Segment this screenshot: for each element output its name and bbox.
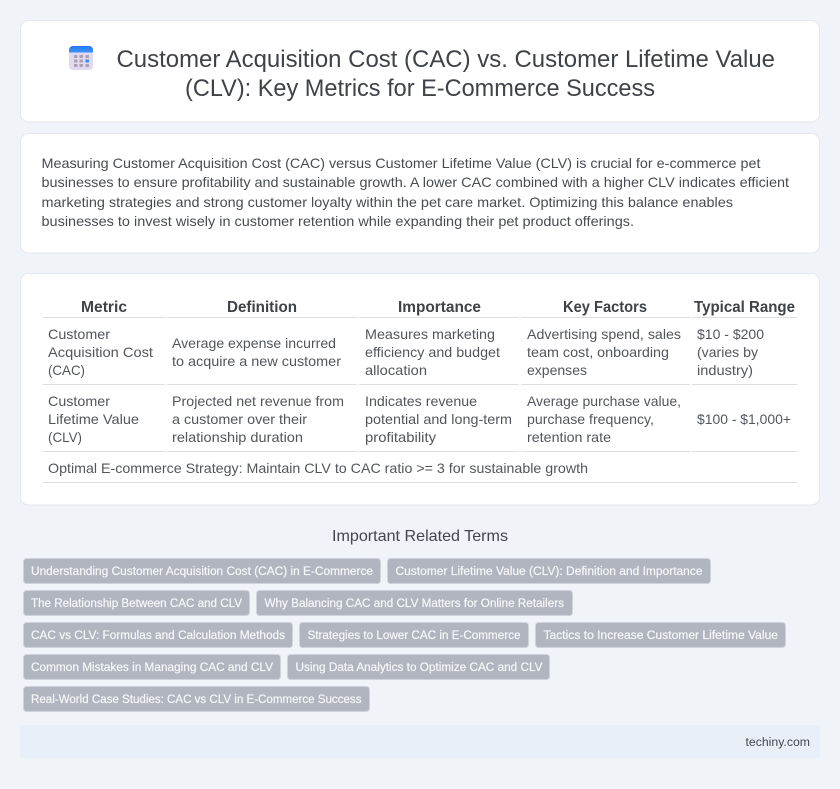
table row: CAC: Measures marketing [365,326,495,342]
table header row: Key Factors [563,299,647,316]
tag: Customer Lifetime Value (CLV): Definition and Importance [396,564,703,578]
tag [24,590,250,616]
table row: CAC: Average expense incurred [172,335,336,351]
title [116,46,775,102]
table row: CLV: $100 - $1,000+ [697,411,791,427]
tag: Understanding Customer Acquisition Cost (CAC) in E-Commerce [31,564,373,578]
tag [388,558,710,584]
table row: CAC: industry) [697,362,753,378]
tag: Why Balancing CAC and CLV Matters for Online Retailers [264,596,564,610]
table row: CLV: Indicates revenue [365,393,477,409]
table header row: Importance [398,299,481,316]
table row: CAC: Acquisition Cost [48,344,153,360]
tag: Real-World Case Studies: CAC vs CLV in E-Commerce Success [31,692,362,706]
table row: CAC: Customer [48,326,110,342]
table row: CLV: relationship duration [172,429,303,445]
table row: CAC: (varies by [697,344,758,360]
intro text block [42,155,789,229]
footer [20,725,820,758]
table row: CAC: Advertising spend, sales [527,326,681,342]
table row: CLV: profitability [365,429,436,445]
table header row [43,299,797,318]
table row: CLV: retention rate [527,429,611,445]
table row: CAC [43,326,797,385]
table row: CLV: Projected net revenue from [172,393,344,409]
table row: CAC: efficiency and budget [365,344,500,360]
tag [24,654,280,680]
table row: CAC: allocation [365,362,427,378]
table row: CLV: a customer over their [172,411,307,427]
table row: CLV [43,393,797,452]
panel: introduction [20,134,820,253]
heading: related terms: Important Related Terms [332,528,508,545]
tag [24,686,370,712]
table header row: Metric [81,299,127,316]
related terms tags [24,558,786,712]
tag [24,622,292,648]
table row: CLV: potential and long-term [365,411,512,427]
table row: CAC: $10 - $200 [697,326,764,342]
title: Customer Acquisition Cost (CAC) vs. Customer Lifetime Value [116,46,775,73]
intro text block: businesses to invest wisely in customer retention while expanding their pet product offerings. [42,213,634,229]
table row: strategy note: Optimal E-commerce Strategy: Maintain CLV to CAC ratio >= 3 for sustainable growth [48,460,588,476]
tag [288,654,550,680]
intro text block: Measuring Customer Acquisition Cost (CAC) versus Customer Lifetime Value (CLV) is crucial for e-commerce pet [42,155,761,171]
table row: CAC: expenses [527,362,587,378]
table row: CLV: purchase frequency, [527,411,654,427]
intro text block: businesses to ensure profitability and sustainable growth. A lower CAC combined with a higher CLV indicates efficient [42,174,789,190]
table row: CLV: Lifetime Value [48,411,139,427]
panel: metrics table [20,274,820,505]
intro text block: marketing strategies and strong customer loyalty within the pet care market. Optimizing this balance enables [42,194,733,210]
tag [24,558,380,584]
tag: Common Mistakes in Managing CAC and CLV [31,660,274,674]
title: (CLV): Key Metrics for E-Commerce Success [185,75,655,102]
tag: Tactics to Increase Customer Lifetime Value [544,628,778,642]
tag [256,590,572,616]
tag: The Relationship Between CAC and CLV [31,596,243,610]
table row: CAC: (CAC) [48,362,85,378]
table header row: Definition [227,299,297,316]
tag: Using Data Analytics to Optimize CAC and CLV [296,660,543,674]
table row: CAC: to acquire a new customer [172,353,341,369]
icon: calendar [69,46,93,70]
table header row: Typical Range [694,299,795,316]
tag [300,622,528,648]
panel: header [20,20,820,122]
table row: CLV: Customer [48,393,110,409]
table row: CLV: (CLV) [48,429,82,445]
footer: techiny.com [746,735,810,749]
table row: CAC: team cost, onboarding [527,344,669,360]
tag: CAC vs CLV: Formulas and Calculation Methods [31,628,285,642]
tag [536,622,786,648]
table row: CLV: Average purchase value, [527,393,681,409]
tag: Strategies to Lower CAC in E-Commerce [308,628,521,642]
